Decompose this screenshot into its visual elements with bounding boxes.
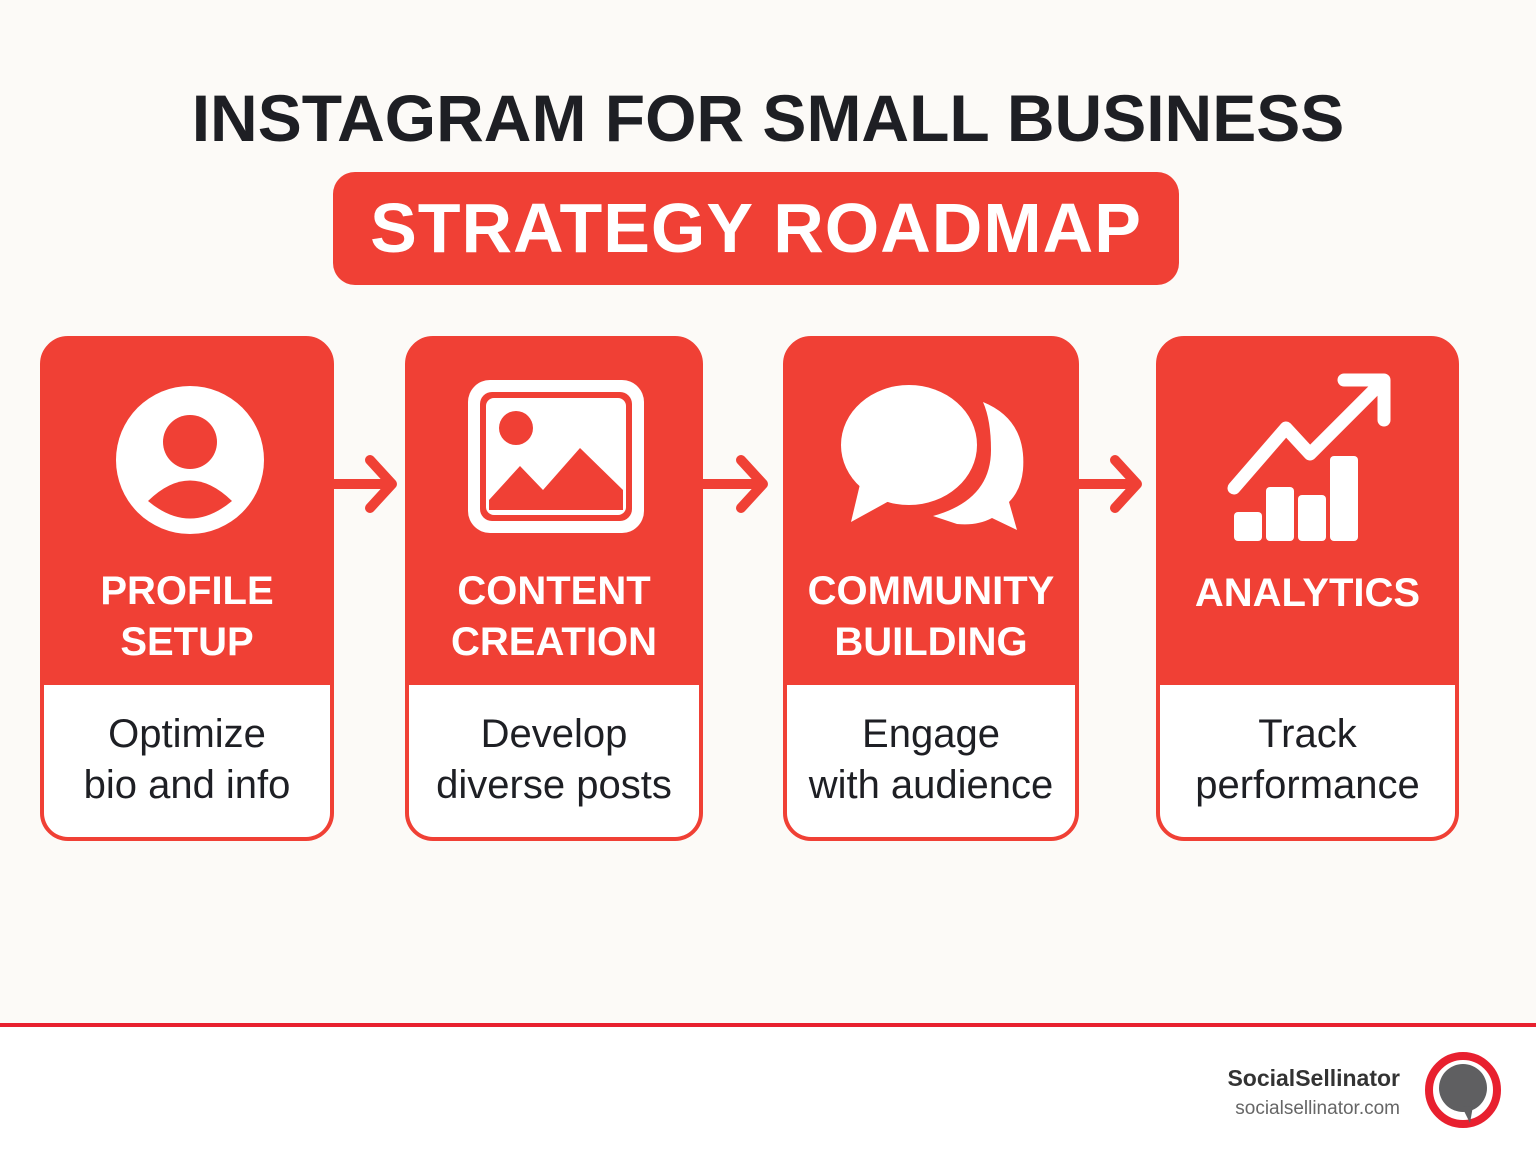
text xyxy=(1160,685,1455,837)
arrow xyxy=(334,455,397,513)
icon: chat bubbles xyxy=(841,385,1024,530)
heading xyxy=(451,569,657,664)
heading: ANALYTICS xyxy=(1195,571,1420,615)
text: with audience xyxy=(809,763,1053,807)
panel: content creation xyxy=(405,336,703,841)
heading: CREATION xyxy=(451,620,657,664)
heading: PROFILE xyxy=(100,569,274,613)
title: INSTAGRAM FOR SMALL BUSINESS xyxy=(192,81,1344,155)
text xyxy=(787,685,1075,837)
text: Develop xyxy=(481,712,627,756)
panel: community building xyxy=(783,336,1079,841)
heading: BUILDING xyxy=(834,620,1028,664)
panel: profile setup xyxy=(40,336,334,841)
text: Track xyxy=(1258,712,1357,756)
logo xyxy=(1425,1052,1501,1128)
text xyxy=(44,685,330,837)
text: Optimize xyxy=(108,712,266,756)
text: bio and info xyxy=(84,763,290,807)
text: diverse posts xyxy=(436,763,672,807)
heading: SETUP xyxy=(120,620,254,664)
text: performance xyxy=(1195,763,1420,807)
text xyxy=(409,685,699,837)
icon: image xyxy=(468,380,644,533)
icon: profile xyxy=(116,386,264,534)
subtitle pill: STRATEGY ROADMAP xyxy=(370,189,1142,267)
brand url: socialsellinator.com xyxy=(1235,1098,1400,1119)
heading: CONTENT xyxy=(457,569,651,613)
heading xyxy=(100,569,274,664)
arrow xyxy=(1079,455,1142,513)
heading xyxy=(808,569,1054,664)
heading: COMMUNITY xyxy=(808,569,1054,613)
footer xyxy=(0,1027,1536,1154)
subtitle pill xyxy=(333,172,1179,285)
panel: analytics xyxy=(1156,336,1459,841)
icon: chart xyxy=(1228,374,1390,541)
brand name: SocialSellinator xyxy=(1227,1065,1400,1091)
text: Engage xyxy=(862,712,1000,756)
arrow xyxy=(703,455,768,513)
